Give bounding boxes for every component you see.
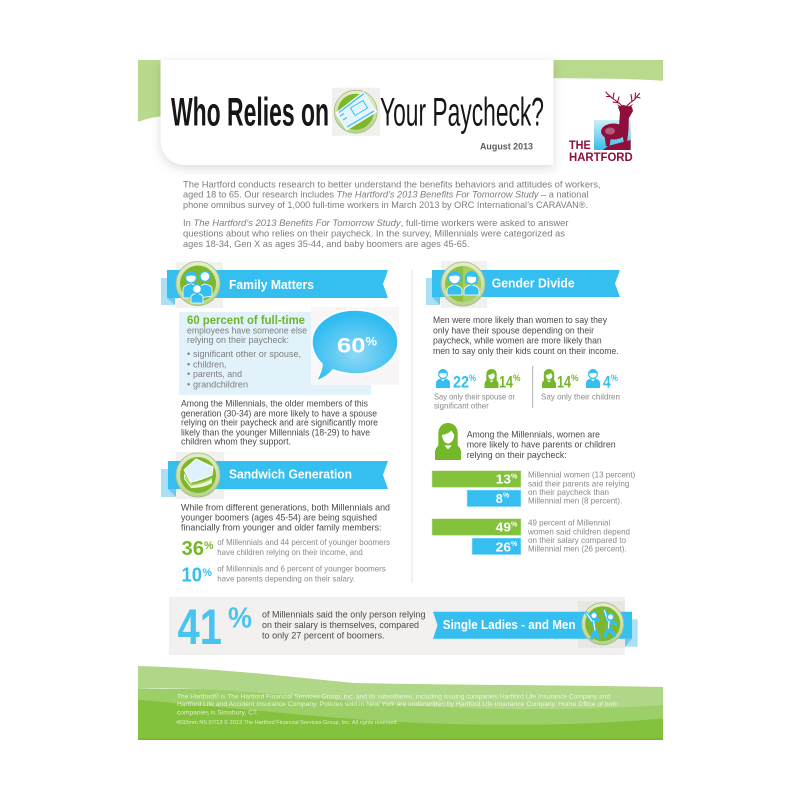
icon: woman — [484, 369, 498, 388]
gender paragraph: Men were more likely than women to say they — [433, 315, 607, 325]
bar chart caption: children: women said children depend — [527, 526, 630, 536]
callout text: of Millennials said the only person relying — [262, 610, 426, 620]
millennials paragraph: generation (30-34) are more likely to have a spouse — [181, 408, 377, 418]
stat divider — [532, 366, 533, 408]
top right green ribbon — [540, 60, 663, 81]
millennial women paragraph — [467, 429, 616, 460]
millennials paragraph: likely than the younger Millennials (18-29) to have — [181, 427, 370, 437]
bar chart caption: children — [527, 518, 630, 554]
icon: woman — [542, 369, 556, 388]
light blue callout box — [179, 312, 371, 395]
panel: single ladies callout — [169, 597, 638, 655]
stat group: children only: % — [571, 373, 578, 383]
millennial women paragraph: more likely to have parents or children — [467, 440, 616, 450]
column divider — [412, 270, 413, 583]
bar chart: children — [432, 519, 521, 555]
bar chart: children: 26 — [496, 539, 511, 554]
intro text: The Hartford conducts research to better understand the benefits behaviors and attitudes of workers, — [183, 179, 600, 189]
callout text — [262, 610, 426, 640]
stat: 36 percent — [182, 537, 390, 560]
callout list: • — [187, 380, 190, 390]
bar chart caption: children: Millennial men (26 percent). — [528, 544, 627, 554]
bar chart caption: children: on their salary compared to — [528, 535, 626, 545]
stat: 10 percent: have parents depending on their salary. — [217, 574, 355, 584]
icon: man — [586, 369, 600, 388]
stat: 10 percent: of Millennials and 6 percent of younger boomers — [217, 564, 386, 574]
stat: 36 percent: have children relying on their income, and — [217, 547, 363, 557]
60 percent speech bubble — [312, 310, 398, 381]
stat group: spouse only: 22 — [453, 373, 469, 392]
footer reference line: 4593mm NS 07/13 © 2013 The Hartford Financial Services Group, Inc. All rights reserved. — [176, 719, 398, 726]
bar chart caption: parents: on their paycheck than — [528, 487, 609, 497]
stat: 10 percent — [182, 564, 386, 587]
callout list: children, — [193, 359, 226, 369]
footer legal text: companies is Simsbury, CT. — [177, 709, 258, 716]
stat group: spouse only: % — [513, 373, 520, 383]
bar chart: parents: 13 — [496, 472, 511, 487]
ribbon: single ladies — [433, 612, 638, 647]
millennial women paragraph: relying on their paycheck: — [467, 450, 567, 460]
date: August 2013 — [480, 141, 533, 152]
bar chart caption: parents: Millennial men (8 percent). — [528, 496, 622, 506]
top left green ribbon — [138, 60, 170, 122]
logo square — [594, 120, 631, 150]
stat group: spouse only: % — [469, 373, 476, 383]
intro text — [183, 179, 600, 249]
millennials paragraph: relying on their paycheck and are significantly more — [181, 418, 378, 428]
icon: dancing couple — [582, 603, 624, 645]
callout text: employees have someone else — [187, 326, 307, 336]
icon: paycheck — [332, 88, 380, 136]
intro text: aged 18 to 65. Our research includes The Hartford’s 2013 Benefits For Tomorrow Study – a national — [183, 190, 588, 200]
ribbon: gender divide — [426, 270, 620, 305]
panel: family matters — [161, 262, 399, 447]
bubble percent sign: % — [366, 334, 377, 348]
bar chart caption: parents: said their parents are relying — [528, 478, 630, 488]
panel: sandwich generation — [161, 452, 390, 587]
callout text: to only 27 percent of boomers. — [262, 630, 384, 640]
gender paragraph: men to say only their kids count on their income. — [433, 346, 619, 356]
millennials paragraph: children whom they support. — [181, 437, 291, 447]
callout background — [169, 597, 625, 655]
bar chart: children: % — [511, 541, 518, 548]
sandwich paragraph: financially from younger and older family members: — [181, 523, 382, 533]
bar chart caption: parents — [528, 470, 636, 506]
logo wordmark: THE — [569, 140, 591, 152]
heading: single ladies: Single Ladies - and Men — [443, 617, 576, 632]
stat: 36 percent: 36 — [182, 538, 204, 560]
callout text: relying on their paycheck: — [187, 335, 289, 345]
intro text: In The Hartford’s 2013 Benefits For Tomorrow Study , full-time workers were asked to answer — [183, 218, 568, 228]
callout list: • — [187, 369, 190, 379]
callout list: • — [187, 359, 190, 369]
spots on stag — [605, 128, 615, 134]
icon backdrop — [176, 452, 224, 499]
panel: gender divide — [426, 261, 636, 555]
logo: The Hartford — [569, 92, 640, 164]
intro text: phone omnibus survey of 1,000 full-time workers in March 2013 by ORC International’s CARAVAN®. — [183, 200, 588, 210]
icon: stag — [601, 92, 640, 150]
footer legal text: Hartford Life and Accident Insurance Company. Policies sold in New York are underwritten by Hartford Life Insurance Company. Home Office of both — [177, 701, 618, 708]
icon: large woman — [435, 423, 461, 460]
big 41 number: 41 — [178, 599, 222, 655]
icon backdrop — [578, 601, 625, 648]
intro text: questions about who relies on their paycheck. In the survey, Millennials were categorized as — [183, 229, 565, 239]
callout text: on their salary is themselves, compared — [262, 620, 419, 630]
heading: sandwich generation: Sandwich Generation — [229, 466, 352, 482]
heading: gender divide: Gender Divide — [492, 276, 575, 291]
callout list — [187, 349, 301, 390]
millennials paragraph — [181, 399, 378, 447]
bar chart: parents — [432, 471, 521, 507]
icon: man — [436, 369, 450, 388]
footer band — [138, 666, 663, 740]
heading: family matters: Family Matters — [229, 277, 314, 292]
stat group: children only: % — [611, 373, 618, 383]
stat group: children only: 4 — [603, 373, 611, 392]
bar chart: parents: % — [511, 474, 518, 480]
icon backdrop — [441, 261, 487, 308]
callout list: parents, and — [193, 369, 242, 379]
sandwich paragraph: younger boomers (ages 45-54) are being squished — [181, 513, 377, 523]
icon backdrop — [176, 262, 223, 308]
stat group: spouse only: 14 — [499, 373, 513, 392]
big percent sign: % — [228, 602, 252, 634]
callout heading: 60 percent of full-time — [187, 313, 305, 327]
bar chart caption: children: 49 percent of Millennial — [528, 518, 610, 528]
ribbon: sandwich generation — [161, 461, 388, 497]
gender paragraph — [433, 315, 619, 356]
stat group: children only — [541, 369, 620, 402]
ribbon: family matters — [161, 270, 388, 305]
logo wordmark line two: HARTFORD — [569, 152, 633, 164]
sandwich paragraph: While from different generations, both Millennials and — [181, 502, 390, 512]
bar chart: children: % — [511, 522, 518, 528]
bar chart: parents: 8 — [496, 491, 503, 506]
footer legal text: The Hartford® is The Hartford Financial Services Group, Inc. and its subsidiaries, including issuing companies Hartford Life Insurance Company and — [177, 692, 610, 700]
stat: 10 percent: % — [202, 567, 212, 579]
bar chart: parents: % — [503, 492, 510, 500]
gender paragraph: only have their spouse depending on their — [433, 325, 594, 335]
stat group: spouse only: significant other — [434, 400, 489, 410]
icon: sandwich — [176, 453, 220, 497]
intro text: ages 18-34, Gen X as ages 35-44, and baby boomers are ages 45-65. — [183, 239, 470, 249]
bubble number: 60 — [337, 334, 366, 358]
icon: family — [176, 262, 220, 306]
bar chart: children: 49 — [496, 520, 511, 535]
title part two: Your Paycheck? — [380, 91, 544, 135]
callout list: • — [187, 349, 190, 359]
millennial women paragraph: Among the Millennials, women are — [467, 429, 600, 439]
millennials paragraph: Among the Millennials, the older members of this — [181, 399, 368, 409]
gender paragraph: paycheck, while women are more likely than — [433, 336, 602, 346]
bubble backdrop — [311, 307, 399, 385]
footer legal text — [177, 692, 618, 716]
bar chart caption: parents: Millennial women (13 percent) — [528, 470, 636, 480]
stat group: children only: Say only their children — [541, 392, 620, 402]
icon: man and woman — [441, 262, 485, 306]
stat group: spouse only: Say only their spouse or — [434, 392, 515, 402]
stat group: spouse only — [434, 369, 520, 410]
callout list: significant other or spouse, — [193, 349, 301, 359]
stat: 10 percent: 10 — [182, 565, 202, 587]
sandwich paragraph — [181, 502, 390, 533]
stat: 36 percent: % — [204, 540, 214, 552]
header card — [160, 60, 554, 165]
stat: 36 percent: of Millennials and 44 percent of younger boomers — [217, 537, 390, 547]
callout text — [187, 326, 307, 345]
callout list: grandchildren — [193, 380, 248, 390]
title part one: Who Relies on — [171, 91, 329, 135]
stat group: children only: 14 — [557, 373, 571, 392]
